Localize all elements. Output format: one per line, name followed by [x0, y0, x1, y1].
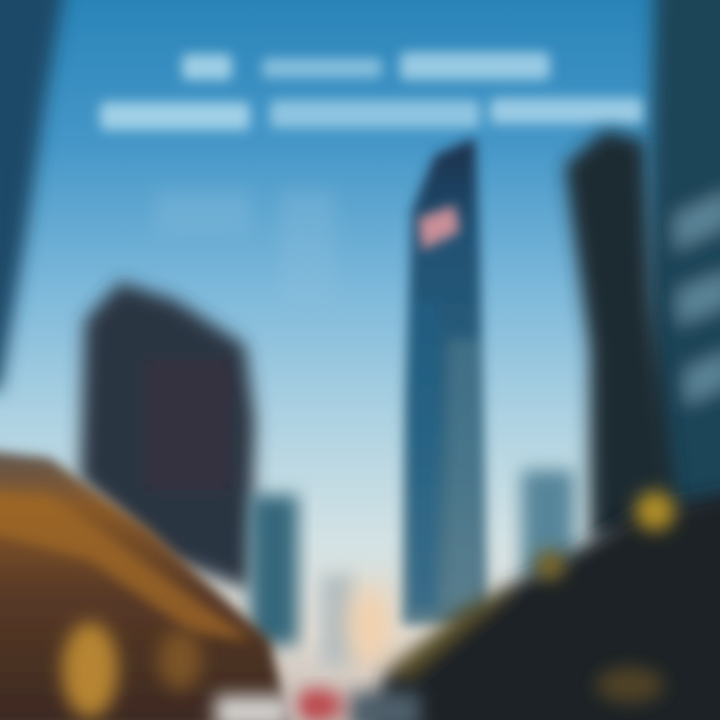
foreground: dark trees at lower right: [370, 490, 720, 720]
icon: yellow street light: [535, 491, 675, 703]
building: central tower: [402, 138, 488, 625]
building: right dark tower: [565, 130, 680, 540]
building: small right block: [522, 470, 574, 580]
icon: pink flag on tower: [418, 205, 460, 250]
icon: warm lamp on canopy: [62, 622, 202, 718]
building: right far block: [640, 0, 720, 520]
text block: faint blurred text in sky: [155, 190, 335, 310]
glow: sunset on horizon: [350, 583, 390, 667]
building: distant pale towers: [322, 575, 354, 665]
building: top-left dark tower: [0, 0, 66, 390]
foreground: orange canopy building: [0, 450, 290, 720]
building: small teal block: [250, 495, 298, 645]
building: mid-left dark block: [80, 282, 255, 590]
title: illegible blurred heading: [100, 52, 645, 130]
foreground: road and cars: [215, 689, 420, 720]
